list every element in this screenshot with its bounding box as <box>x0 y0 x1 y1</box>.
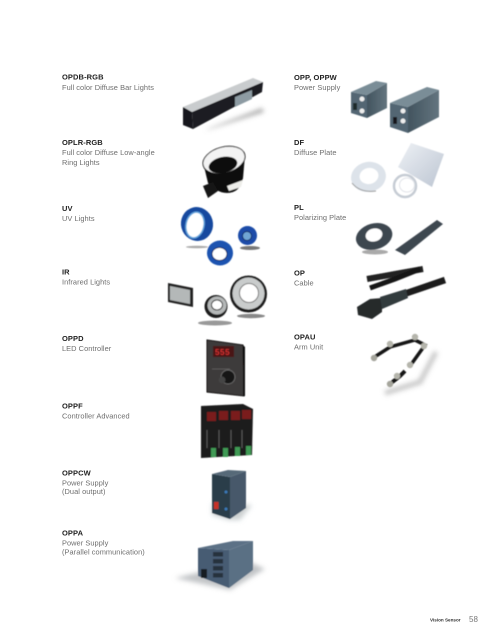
label: PL <box>294 203 346 222</box>
label: OPPCW: OPPCW <box>62 468 92 478</box>
label: OPP, OPPW <box>294 73 341 92</box>
label: OPPCW: (Dual output) <box>62 487 106 496</box>
product: low-angle ring light <box>200 142 248 198</box>
label: UV: UV Lights <box>62 214 95 223</box>
label: OPDB-RGB: OPDB-RGB <box>62 72 104 82</box>
product: OPPA power supply <box>175 541 265 590</box>
footer: section name and page number <box>430 615 478 624</box>
label: OPPD: OPPD <box>62 334 84 343</box>
label: DF <box>294 138 337 157</box>
label: OPAU <box>294 332 323 352</box>
label: OPPA: Power Supply <box>62 538 109 548</box>
product: diffuse plates <box>348 143 444 197</box>
label: OPPA <box>62 528 145 556</box>
label: OP: Cable <box>294 278 314 288</box>
product: arm unit <box>371 334 436 393</box>
product: UV ring lights <box>177 203 260 266</box>
label: OPPF: Controller Advanced <box>62 412 130 420</box>
label: IR: Infrared Lights <box>62 278 110 286</box>
label: OPPF: OPPF <box>62 402 83 410</box>
label: OPP, OPPW: Power Supply <box>294 83 341 92</box>
label: OPPD: LED Controller <box>62 344 112 353</box>
label: OPPCW <box>62 468 109 496</box>
label: OPLR-RGB: OPLR-RGB <box>62 138 103 147</box>
product: IR ring lights <box>168 276 267 326</box>
label: OP <box>294 268 314 288</box>
label: PL: Polarizing Plate <box>294 213 346 222</box>
label: PL: PL <box>294 203 304 212</box>
product: OPPD LED controller: 555 <box>215 348 230 357</box>
label: OPAU: OPAU <box>294 332 316 342</box>
label: OPPCW: Power Supply <box>62 478 109 488</box>
product: OPPCW power supply <box>212 470 252 520</box>
label: UV: UV <box>62 204 73 213</box>
product: bar light <box>183 78 264 130</box>
label: IR <box>62 268 110 286</box>
footer: section name and page number: 58 <box>469 615 478 624</box>
product: cables <box>357 269 445 319</box>
label: DF: Diffuse Plate <box>294 148 337 157</box>
label: UV <box>62 204 95 223</box>
label: OPAU: Arm Unit <box>294 342 323 352</box>
label: OPDB-RGB: Full color Diffuse Bar Lights <box>62 83 154 92</box>
label: OP: OP <box>294 268 305 278</box>
label: OPLR-RGB <box>62 138 155 167</box>
label: OPP, OPPW: OPP, OPPW <box>294 73 338 82</box>
footer: section name and page number: Vision Sensor <box>430 618 461 622</box>
product: polarizing plates <box>353 219 443 255</box>
label: OPPD <box>62 334 112 353</box>
label: OPPA: (Parallel communication) <box>62 548 145 556</box>
product: OPP, OPPW power supplies <box>351 81 439 133</box>
label: DF: DF <box>294 138 305 147</box>
label: IR: IR <box>62 268 70 276</box>
label: OPLR-RGB: Ring Lights <box>62 158 100 167</box>
product: OPPF controller advanced <box>201 404 253 458</box>
label: OPLR-RGB: Full color Diffuse Low-angle <box>62 148 155 157</box>
label: OPPF <box>62 402 130 420</box>
label: OPPA: OPPA <box>62 528 84 538</box>
product: OPPD LED controller <box>207 340 245 396</box>
label: OPDB-RGB <box>62 72 154 92</box>
